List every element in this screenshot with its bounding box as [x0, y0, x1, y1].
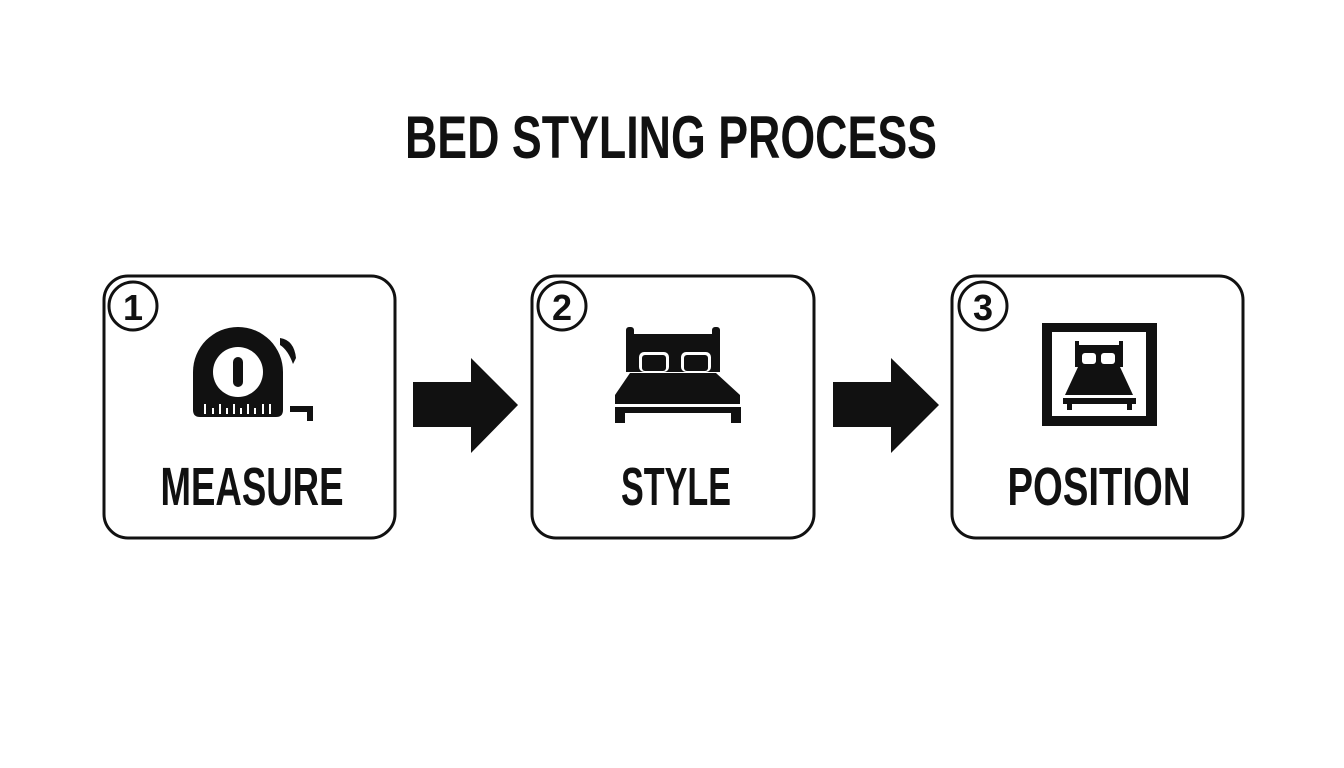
arrow 1 — [413, 358, 518, 453]
number badge 3 — [959, 282, 1007, 330]
title: BED STYLING PROCESS — [405, 104, 937, 171]
panel: style — [532, 276, 814, 538]
icon: bed — [615, 327, 741, 423]
panel: measure — [104, 276, 395, 538]
arrow 2 — [833, 358, 939, 453]
number badge 2 — [538, 282, 586, 330]
label: measure: MEASURE — [160, 457, 344, 517]
panel: position — [952, 276, 1243, 538]
icon: tape measure — [193, 327, 313, 421]
number badge 3: 3 — [973, 287, 993, 328]
number badge 1 — [109, 282, 157, 330]
label: style: STYLE — [621, 457, 731, 517]
number badge 2: 2 — [552, 287, 572, 328]
label: position: POSITION — [1008, 457, 1190, 517]
icon: bed in room — [1042, 323, 1157, 426]
number badge 1: 1 — [123, 287, 143, 328]
